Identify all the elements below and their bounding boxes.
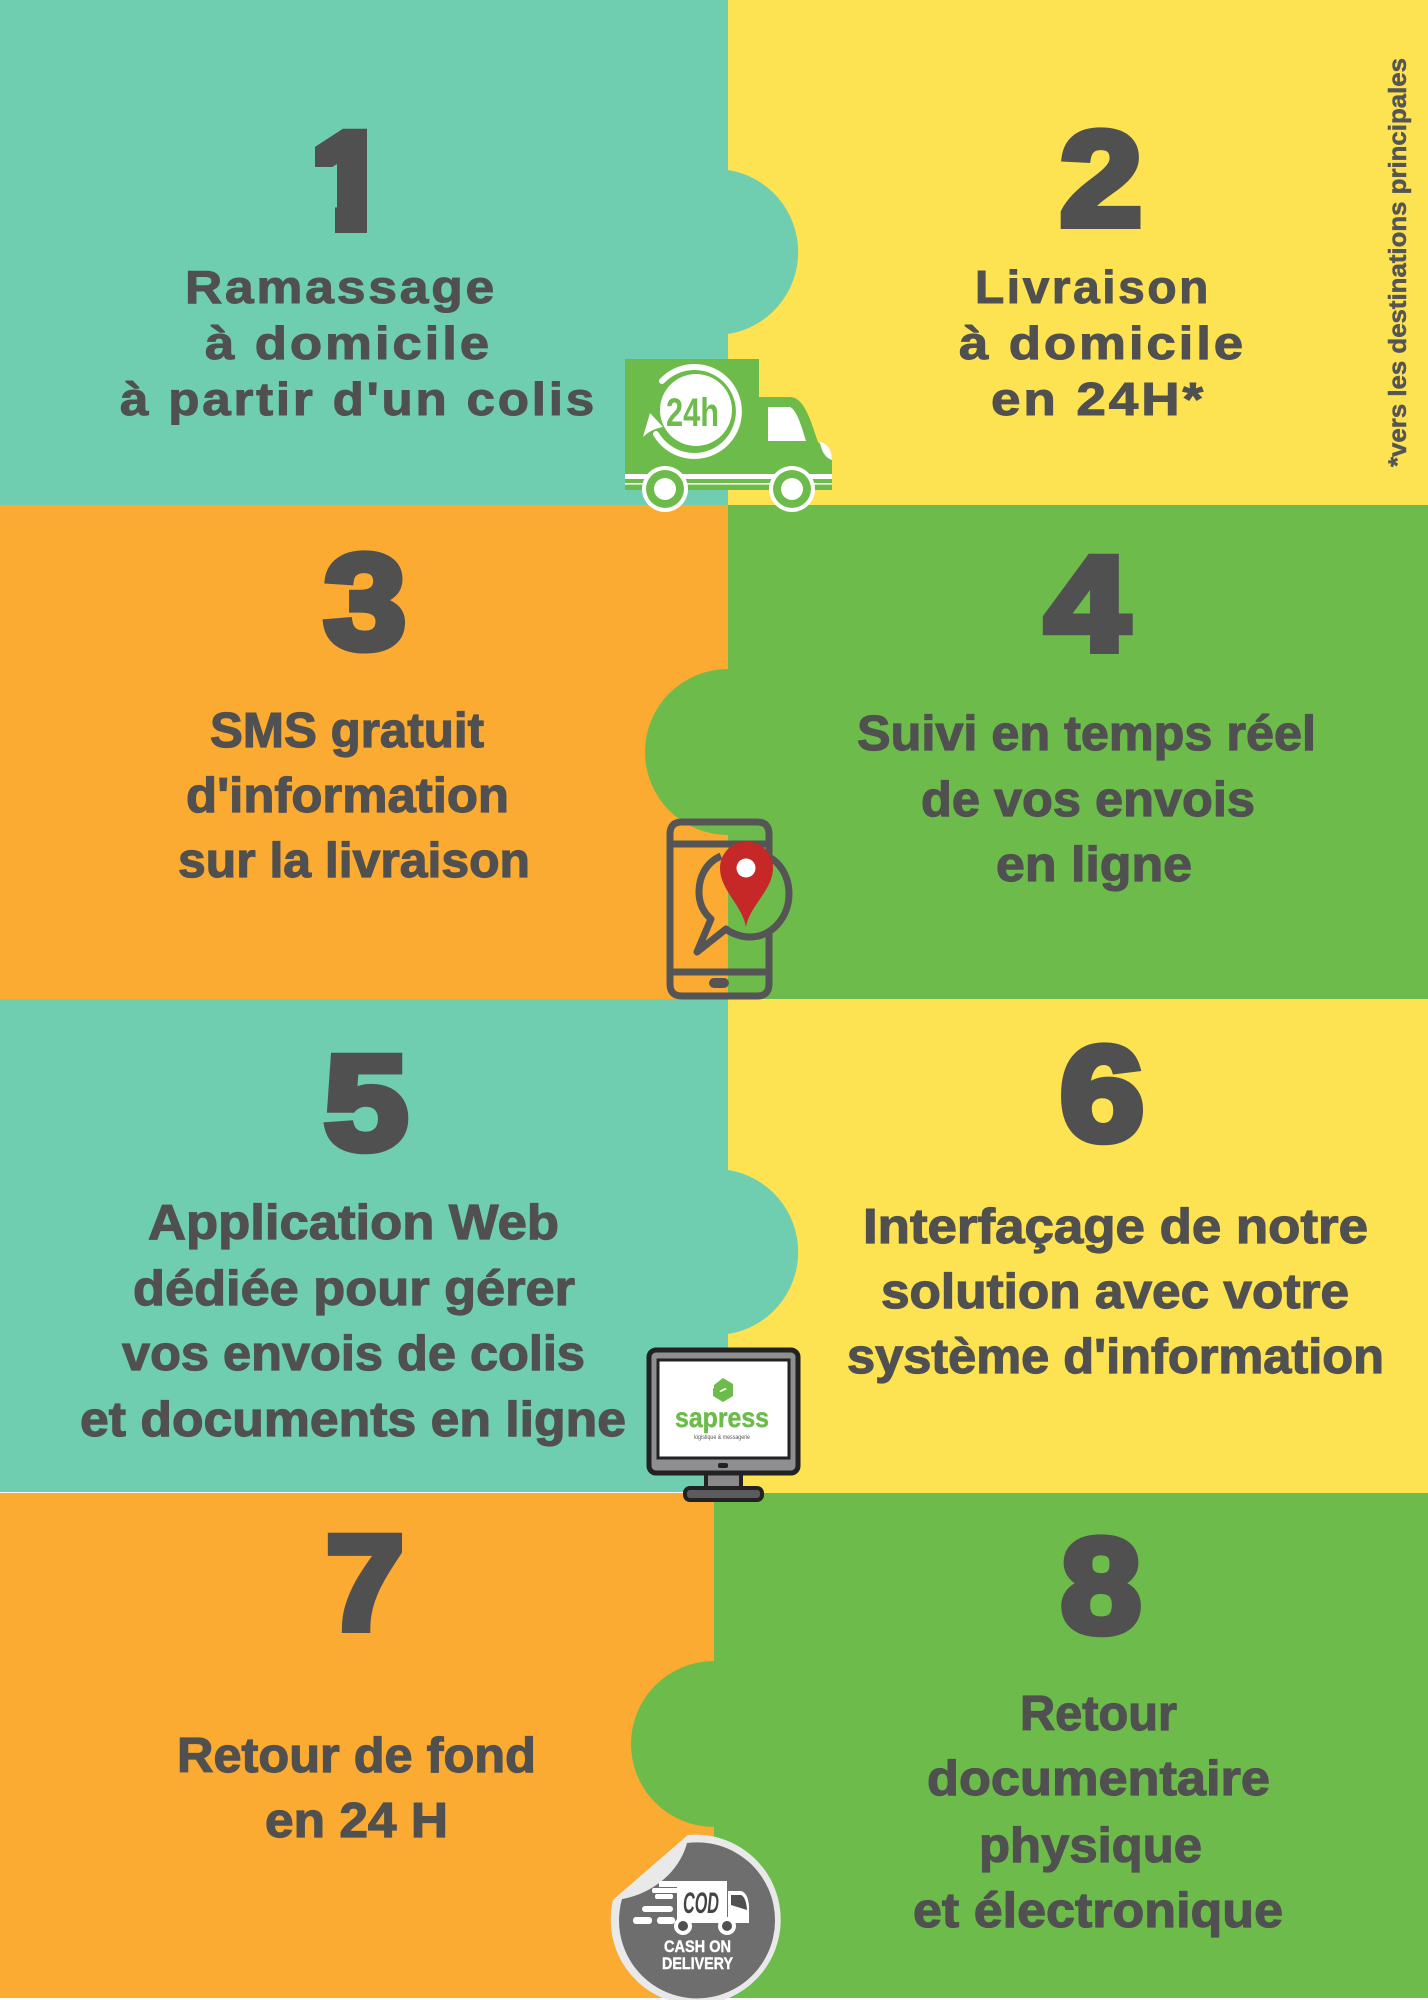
text: Suivi en temps réel: en ligne	[996, 838, 1192, 892]
text: Retour de fond	[177, 1729, 536, 1848]
text: Application Web: vos envois de colis	[122, 1327, 585, 1381]
icon: 24h delivery truck	[625, 359, 832, 512]
text: Ramassage à domicile: à partir d'un colis	[120, 373, 597, 425]
text: Livraison à domicile en 24H: Livraison	[975, 261, 1211, 313]
text: Suivi en temps réel: de vos envois	[921, 773, 1255, 827]
panel 5: web app	[0, 999, 798, 1492]
text: Livraison à domicile en 24H: à domicile	[959, 317, 1246, 369]
text: Retour de fond: Retour de fond	[177, 1729, 536, 1783]
footnote: *vers les destinations principales	[1384, 58, 1412, 467]
text: Ramassage à domicile: Ramassage	[185, 261, 497, 313]
number 4: 4	[1045, 530, 1129, 679]
text: Suivi en temps réel	[857, 707, 1316, 892]
text: Interfaçage: système d'information	[847, 1330, 1384, 1384]
text: Interfaçage: solution avec votre	[881, 1265, 1349, 1319]
text: Retour documentaire: documentaire	[927, 1752, 1270, 1806]
text: Retour documentaire: et électronique	[913, 1884, 1283, 1938]
number 6: 6	[1060, 1020, 1144, 1169]
icon: monitor with sapress logo	[649, 1350, 798, 1500]
text: Interfaçage	[847, 1200, 1384, 1384]
text: Livraison à domicile en 24H	[959, 261, 1246, 425]
text: SMS gratuit	[178, 704, 530, 888]
number 3: 3	[324, 528, 406, 677]
text: SMS gratuit: d'information	[186, 769, 509, 823]
text: Application Web	[80, 1196, 626, 1447]
text: Application Web: dédiée pour gérer	[133, 1262, 575, 1316]
text: Livraison à domicile en 24H: en 24H*	[991, 373, 1206, 425]
text: Ramassage à domicile: à domicile	[205, 317, 492, 369]
text: Retour documentaire	[913, 1687, 1283, 1938]
icon: 24h delivery truck: 24h	[666, 391, 719, 435]
panel 4: tracking	[645, 505, 1428, 999]
icon: cash on delivery sticker: DELIVERY	[662, 1954, 734, 1973]
text: Application Web: et documents en ligne	[80, 1393, 626, 1447]
number 7: 7	[326, 1509, 404, 1658]
icon: monitor with sapress logo: sapress	[675, 1402, 769, 1433]
number 5: 5	[324, 1029, 408, 1178]
text: Interfaçage: Interfaçage de notre	[863, 1200, 1368, 1254]
icon: cash on delivery sticker: CASH ON	[664, 1937, 731, 1956]
number 2: 2	[1060, 105, 1142, 254]
panel 3: SMS	[0, 505, 728, 999]
icon: cash on delivery sticker	[611, 1835, 781, 2000]
panel 8: document return	[631, 1493, 1428, 1998]
text: SMS gratuit: SMS gratuit	[210, 704, 484, 758]
icon: monitor with sapress logo: logistique & messagerie	[694, 1434, 750, 1441]
text: Retour documentaire: physique	[979, 1819, 1202, 1873]
text: Retour de fond: en 24 H	[265, 1794, 448, 1848]
number 1: 1	[313, 108, 387, 257]
text: Application Web: Application Web	[148, 1196, 559, 1250]
icon: cash on delivery sticker: COD	[683, 1887, 719, 1920]
text: Ramassage à domicile	[120, 261, 597, 425]
panel 2: home delivery	[728, 0, 1428, 505]
panel 1: pickup	[0, 0, 798, 505]
text: SMS gratuit: sur la livraison	[178, 834, 530, 888]
text: Suivi en temps réel: Suivi en temps réel	[857, 707, 1316, 761]
text: Retour documentaire: Retour	[1020, 1687, 1177, 1741]
number 8: 8	[1061, 1512, 1141, 1661]
icon: phone with location pin	[670, 822, 789, 996]
panel 6: interface	[728, 999, 1428, 1493]
panel 7: cash return	[0, 1493, 714, 1998]
